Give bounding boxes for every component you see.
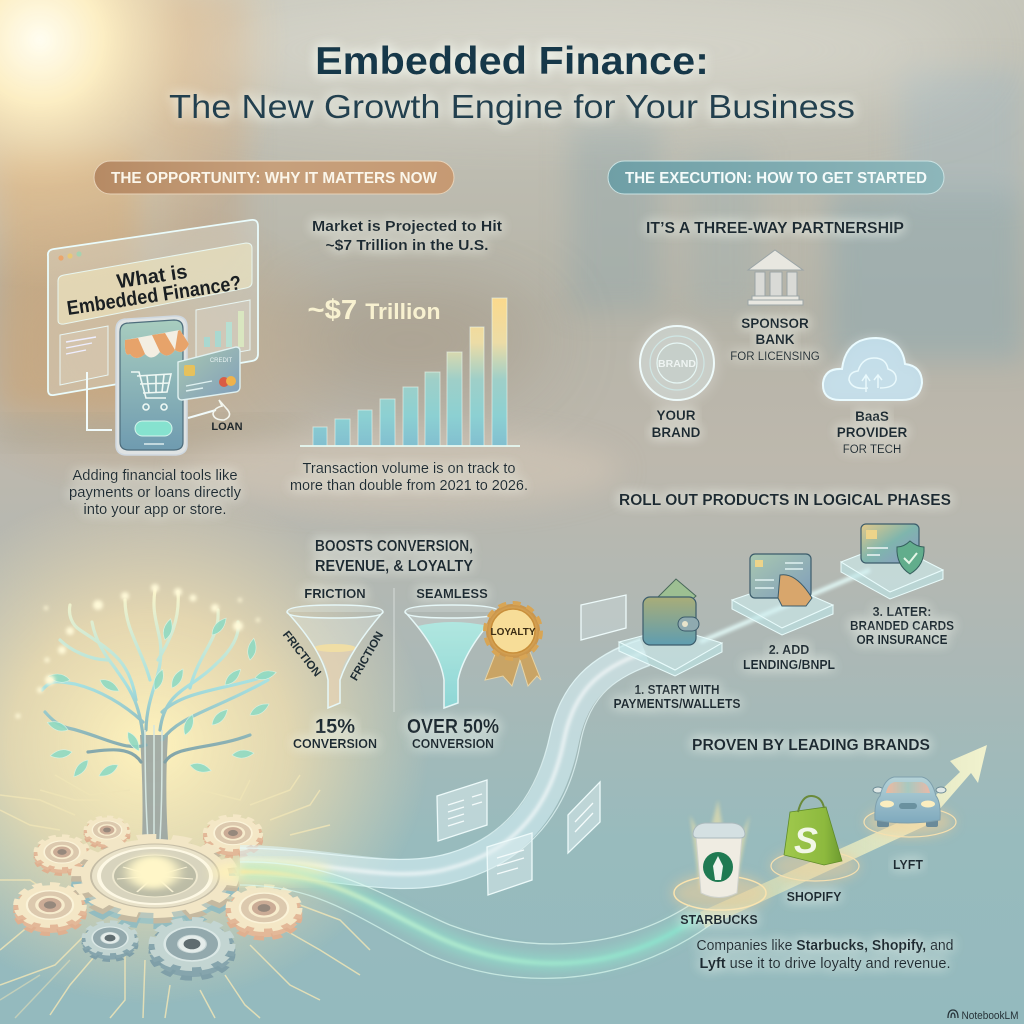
description: Adding financial tools like: [72, 467, 238, 484]
circuit traces: [0, 775, 370, 1018]
phase 3 platform: [841, 524, 943, 599]
phase 2 label: [743, 643, 835, 672]
three-way partnership: [635, 220, 922, 456]
illustration: what is embedded finance: [48, 220, 258, 518]
warm origin glow: [210, 862, 330, 882]
flowing data stream: [210, 570, 870, 978]
friction funnel: FRICTION: [280, 629, 323, 679]
connector lines: [87, 372, 216, 430]
label: sponsor bank: FOR LICENSING: [730, 351, 820, 363]
green ribbon: [240, 862, 710, 978]
growth arrow: [700, 745, 987, 928]
heading: REVENUE, & LOYALTY: [315, 558, 473, 575]
link between platforms: [700, 570, 870, 642]
label: lyft: LYFT: [893, 858, 923, 872]
caption: [696, 937, 954, 972]
phase 1 platform: [619, 579, 722, 676]
bar chart: [300, 298, 520, 446]
conversion panel: [280, 538, 541, 751]
heading: [312, 219, 502, 254]
label: your brand: YOUR: [656, 408, 696, 423]
seamless funnel: SEAMLESS: [416, 586, 488, 601]
caption: Lyft use it to drive loyalty and revenue.: [700, 955, 950, 972]
credit card: CREDIT: [210, 358, 232, 364]
heading: [315, 538, 473, 575]
heading: title: [169, 40, 855, 125]
icon: sponsor bank: [748, 250, 803, 305]
seamless stat: CONVERSION: [412, 736, 494, 751]
phase 1 label: 1. START WITH: [634, 683, 720, 697]
friction stat: CONVERSION: [293, 736, 377, 751]
phase 3 label: [850, 605, 954, 647]
heading: PROVEN BY LEADING BRANDS: [692, 737, 930, 754]
heading: title: Embedded Finance:: [315, 40, 709, 83]
main gear: [81, 839, 229, 924]
label: sponsor bank: SPONSOR: [741, 316, 809, 331]
icon: shopify: [771, 796, 859, 883]
glowing tree illustration: [16, 584, 277, 870]
label: baas provider: FOR TECH: [843, 444, 901, 456]
label: starbucks: STARBUCKS: [680, 913, 758, 927]
phase 2 label: 2. ADD: [769, 643, 809, 657]
phase 1 label: PAYMENTS/WALLETS: [614, 697, 740, 711]
label: sponsor bank: BANK: [756, 332, 795, 347]
phase 2 platform: [732, 554, 833, 635]
big value: ~$7 Trillion: [308, 294, 440, 325]
phase 1 label: [614, 683, 740, 711]
browser heading: Embedded Finance?: [65, 272, 243, 320]
description: [69, 467, 241, 518]
description: payments or loans directly: [69, 484, 241, 501]
heading: ROLL OUT PRODUCTS IN LOGICAL PHASES: [619, 492, 951, 509]
browser heading: What is: [115, 261, 189, 293]
credit card: [178, 347, 240, 400]
phase 3 label: 3. LATER:: [873, 605, 931, 619]
caption: more than double from 2021 to 2026.: [290, 477, 528, 494]
watermark: NotebookLM: [962, 1010, 1018, 1022]
heading pill: the execution: [608, 161, 944, 194]
icon: shopify: S: [794, 820, 818, 861]
heading pill: the execution: THE EXECUTION: HOW TO GET STARTED: [625, 170, 927, 187]
icon: your brand: BRAND: [658, 358, 696, 370]
loyalty badge: LOYALTY: [490, 626, 536, 638]
market projection: [290, 219, 528, 494]
description: into your app or store.: [84, 501, 226, 518]
loyalty badge: [485, 604, 541, 686]
glowing tips: [16, 584, 260, 718]
seamless stat: [407, 716, 499, 751]
heading pill: the opportunity: THE OPPORTUNITY: WHY IT MATTERS NOW: [111, 170, 437, 187]
label: your brand: BRAND: [652, 425, 701, 440]
caption: Transaction volume is on track to: [302, 460, 516, 477]
loan bag: [211, 400, 243, 433]
icon: lyft car: [864, 777, 956, 837]
proven by leading brands: [672, 737, 987, 972]
browser window: [48, 220, 258, 395]
canopy branches: [42, 590, 270, 762]
label: baas provider: PROVIDER: [837, 425, 908, 440]
gears: [18, 817, 297, 977]
label: shopify: SHOPIFY: [787, 890, 842, 904]
heading: BOOSTS CONVERSION,: [315, 538, 473, 555]
seamless funnel: [405, 586, 499, 708]
friction funnel: [280, 586, 386, 708]
friction funnel: FRICTION: [349, 630, 386, 683]
trunk strands: [145, 725, 162, 870]
phase 3 label: OR INSURANCE: [856, 633, 948, 647]
heading: title: The New Growth Engine for Your Business: [169, 88, 855, 125]
caption: [290, 460, 528, 494]
phone: [116, 316, 189, 455]
heading pill: the opportunity: [94, 161, 454, 194]
friction stat: 15%: [315, 716, 355, 738]
icon: starbucks: [672, 800, 768, 912]
seamless stat: OVER 50%: [407, 716, 499, 738]
rear small gears: [37, 817, 259, 874]
icon: your brand: [635, 321, 719, 405]
floating documents: [437, 595, 626, 895]
front small gears: [18, 885, 297, 977]
phase 3 label: BRANDED CARDS: [850, 619, 954, 633]
trunk: [140, 735, 170, 865]
caption: Companies like Starbucks, Shopify, and: [696, 937, 954, 954]
loan bag: LOAN: [211, 421, 243, 433]
leaves: [46, 616, 277, 779]
heading: ~$7 Trillion in the U.S.: [326, 238, 488, 254]
label: sponsor bank: [730, 316, 820, 363]
label: baas provider: BaaS: [855, 409, 889, 424]
icon: cloud: [823, 338, 922, 400]
phase 2 label: LENDING/BNPL: [743, 658, 835, 672]
label: your brand: [652, 408, 701, 440]
roll out phases: [614, 492, 954, 711]
blue ribbon: [240, 640, 650, 889]
heading: IT’S A THREE-WAY PARTNERSHIP: [646, 220, 904, 237]
label: baas provider: [837, 409, 908, 456]
friction stat: [293, 716, 377, 751]
friction funnel: FRICTION: [304, 586, 366, 601]
heading: Market is Projected to Hit: [312, 219, 502, 235]
